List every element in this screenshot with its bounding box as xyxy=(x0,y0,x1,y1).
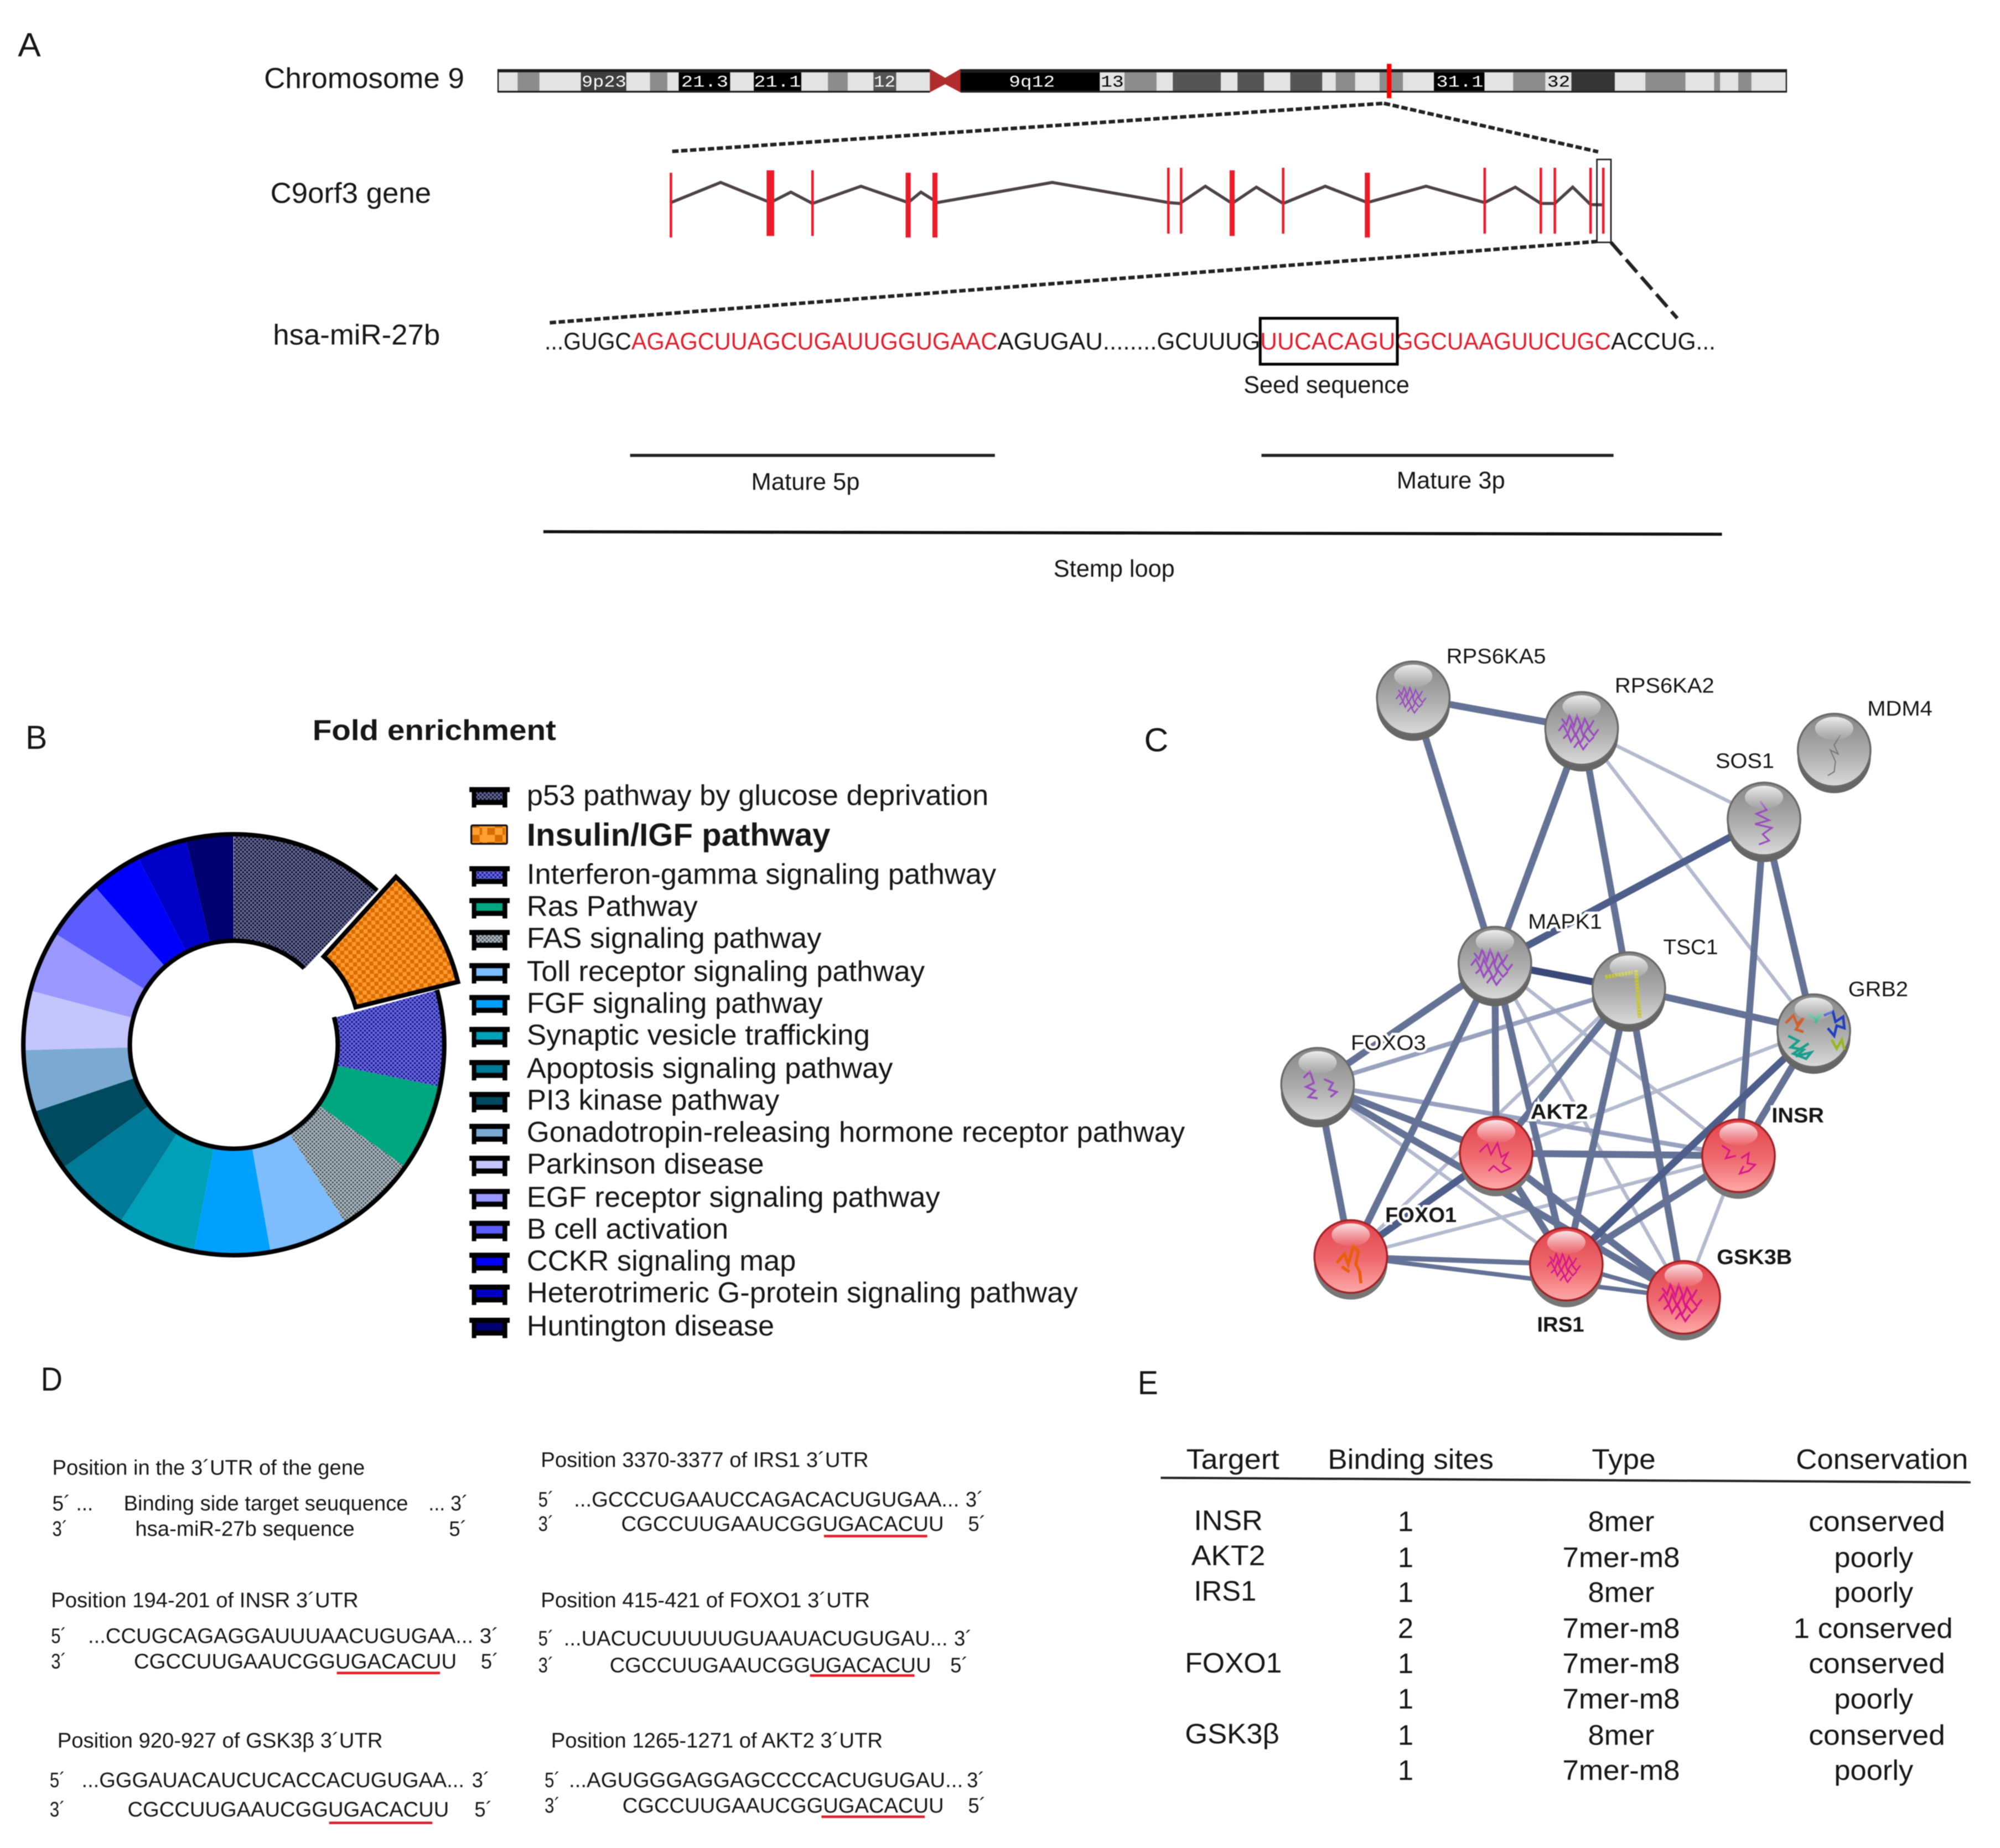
alignment: GSK3β: Position 920-927 of GSK3β 3´UTR xyxy=(58,1730,382,1753)
legend row: Apoptosis: Apoptosis signaling pathway xyxy=(527,1052,893,1084)
node labels xyxy=(1351,645,1932,1337)
panel E: target table xyxy=(1138,1364,1971,1786)
alignment: IRS1: 3´ xyxy=(538,1513,553,1536)
node: GRB2 xyxy=(1777,995,1851,1074)
alignment: INSR: 3´ xyxy=(480,1625,499,1648)
precursor sequence: AGAGCUUAGCUGAUUGGUGAAC xyxy=(631,328,997,355)
alignment: AKT2: Position 1265-1271 of AKT2 3´UTR xyxy=(551,1730,883,1753)
alignment: AKT2: 5´ xyxy=(545,1769,560,1792)
chromosome ideogram: 21.3 xyxy=(681,73,728,92)
legend row: Gonadotropin: Gonadotropin-releasing hormone receptor pathway xyxy=(527,1116,1185,1148)
precursor sequence: GCUUUG xyxy=(1157,328,1260,355)
panel letter C: C xyxy=(1144,722,1168,759)
alignment: FOXO1: 5´ xyxy=(538,1627,553,1650)
alignment: INSR xyxy=(51,1589,499,1674)
table column: type: 8mer xyxy=(1588,1506,1654,1538)
alignment: FOXO1 xyxy=(538,1589,972,1678)
alignment: FOXO1: CGCCUUGAAUCGGUGACACUU xyxy=(610,1654,931,1678)
node labels: GRB2 xyxy=(1848,978,1908,1001)
alignment: GSK3β: 5´ xyxy=(50,1769,65,1792)
table column: target: IRS1 xyxy=(1194,1575,1256,1607)
chromosome ideogram: 31.1 xyxy=(1436,73,1484,92)
precursor sequence: UUCACAGU xyxy=(1260,328,1395,355)
legend row: Toll: Toll receptor signaling pathway xyxy=(527,955,925,987)
alignment: GSK3β: CGCCUUGAAUCGGUGACACUU xyxy=(127,1798,449,1821)
node: FOXO1 xyxy=(1314,1220,1387,1300)
panel letter B: B xyxy=(25,719,47,756)
table header: Binding sites xyxy=(1328,1443,1494,1475)
alignment: IRS1: CGCCUUGAAUCGGUGACACUU xyxy=(621,1513,944,1536)
legend row: Interferon-gamma: Interferon-gamma signaling pathway xyxy=(527,858,996,890)
table column: type: 7mer-m8 xyxy=(1562,1754,1680,1786)
node labels: SOS1 xyxy=(1716,750,1774,773)
legend xyxy=(469,779,1185,1342)
alignment: IRS1: 3´ xyxy=(966,1488,983,1511)
table column: type: 7mer-m8 xyxy=(1562,1683,1680,1715)
alignment legend: hsa-miR-27b sequence xyxy=(135,1518,355,1541)
stem loop bar and label xyxy=(543,532,1722,582)
table column: binding sites: 2 xyxy=(1398,1612,1413,1644)
panel letter D: D xyxy=(41,1360,63,1397)
table column: target: INSR xyxy=(1194,1504,1263,1536)
table column: binding sites: 1 xyxy=(1398,1506,1413,1538)
legend row: Huntington: Huntington disease xyxy=(527,1309,774,1342)
node labels: MAPK1 xyxy=(1528,910,1602,934)
node labels: INSR xyxy=(1771,1104,1824,1127)
network edges xyxy=(1318,698,1814,1297)
table column: target xyxy=(1185,1504,1282,1749)
legend row: B cell: B cell activation xyxy=(527,1213,728,1245)
node: MDM4 xyxy=(1797,714,1871,793)
legend row: p53: p53 pathway by glucose deprivation xyxy=(527,779,988,811)
precursor sequence xyxy=(545,328,1716,355)
label: Chromosome 9: Chromosome 9 xyxy=(264,62,464,94)
legend row: Synaptic: Synaptic vesicle trafficking xyxy=(527,1019,870,1051)
table column: type: 8mer xyxy=(1588,1719,1654,1751)
table column: conservation: poorly xyxy=(1834,1754,1914,1786)
table column: conservation: 1 conserved xyxy=(1794,1612,1953,1644)
legend row: PI3 kinase: PI3 kinase pathway xyxy=(527,1084,779,1116)
panel letter A: A xyxy=(18,26,41,63)
precursor sequence: ACCUG... xyxy=(1611,328,1716,355)
chromosome ideogram: 32 xyxy=(1547,73,1570,92)
panel D: binding site alignments xyxy=(41,1360,986,1824)
alignment: AKT2: ...AGUGGGAGGAGCCCCACUGUGAU... xyxy=(569,1769,963,1792)
chromosome ideogram xyxy=(498,64,1787,98)
panel C: protein interaction network xyxy=(1144,645,1932,1340)
gene structure: introns and exons xyxy=(670,159,1611,242)
panel A: gene locus xyxy=(18,26,1787,582)
table column: binding sites: 1 xyxy=(1398,1683,1413,1715)
mature 5p bar and label xyxy=(630,454,995,495)
mature 3p bar and label: Mature 3p xyxy=(1397,467,1505,494)
table header: Targert xyxy=(1186,1443,1279,1475)
alignment: GSK3β xyxy=(50,1730,493,1824)
node: INSR xyxy=(1702,1119,1775,1199)
alignment: INSR: 5´ xyxy=(481,1650,499,1674)
label: hsa-miR-27b: hsa-miR-27b xyxy=(273,318,440,350)
node labels: RPS6KA5 xyxy=(1447,645,1546,669)
alignment: AKT2: CGCCUUGAAUCGGUGACACUU xyxy=(623,1794,944,1818)
node labels: TSC1 xyxy=(1664,936,1718,959)
chromosome ideogram: 12 xyxy=(874,73,895,92)
table column: binding sites: 1 xyxy=(1398,1719,1413,1751)
table column: conservation: conserved xyxy=(1809,1719,1945,1751)
table column: binding sites: 1 xyxy=(1398,1576,1413,1608)
table column: conservation: conserved xyxy=(1809,1648,1945,1679)
node: GSK3B xyxy=(1647,1261,1721,1340)
node: RPS6KA2 xyxy=(1545,692,1618,772)
legend row: EGF: EGF receptor signaling pathway xyxy=(527,1181,940,1213)
alignment: IRS1: ...GCCCUGAAUCCAGACACUGUGAA... xyxy=(574,1488,959,1511)
table column: binding sites: 1 xyxy=(1398,1648,1413,1679)
table column: type: 7mer-m8 xyxy=(1562,1648,1680,1679)
alignment: IRS1 xyxy=(538,1449,986,1538)
alignment: FOXO1: 5´ xyxy=(950,1654,968,1678)
alignment legend: 5´ xyxy=(449,1518,467,1541)
alignment: FOXO1: 3´ xyxy=(538,1654,553,1678)
alignment legend xyxy=(53,1456,468,1541)
alignment: GSK3β: 5´ xyxy=(474,1798,493,1821)
alignment legend: 5´ ... xyxy=(53,1492,93,1515)
panel B: fold enrichment donut xyxy=(0,714,1185,1342)
node: FOXO3 xyxy=(1281,1048,1354,1127)
node labels: AKT2 xyxy=(1531,1100,1588,1124)
chromosome ideogram: 21.1 xyxy=(754,73,801,92)
legend row: Ras: Ras Pathway xyxy=(527,890,698,922)
seed sequence box xyxy=(1260,318,1397,364)
node: IRS1 xyxy=(1530,1228,1603,1307)
panel letter E: E xyxy=(1138,1364,1158,1401)
table column: conservation: conserved xyxy=(1809,1506,1945,1538)
alignment: IRS1: 5´ xyxy=(968,1513,986,1536)
label: C9orf3 gene: C9orf3 gene xyxy=(271,177,431,209)
legend row: FAS: FAS signaling pathway xyxy=(527,922,821,954)
table column: binding sites xyxy=(1398,1506,1413,1786)
alignment: FOXO1: 3´ xyxy=(954,1627,972,1650)
alignment: INSR: 3´ xyxy=(51,1650,66,1674)
table column: conservation: poorly xyxy=(1834,1542,1914,1573)
chromosome ideogram: 13 xyxy=(1101,73,1124,92)
table column: conservation: poorly xyxy=(1834,1683,1914,1715)
node: SOS1 xyxy=(1727,783,1801,862)
table column: type xyxy=(1562,1506,1680,1786)
alignment: INSR: CGCCUUGAAUCGGUGACACUU xyxy=(134,1650,457,1674)
alignment legend: Binding side target seuquence xyxy=(124,1492,408,1515)
table column: binding sites: 1 xyxy=(1398,1754,1413,1786)
alignment: IRS1: Position 3370-3377 of IRS1 3´UTR xyxy=(541,1449,869,1472)
node: TSC1 xyxy=(1592,953,1666,1032)
table column: target: GSK3β xyxy=(1185,1718,1279,1749)
alignment: INSR: ...CCUGCAGAGGAUUUAACUGUGAA... xyxy=(88,1625,473,1648)
table header: Type xyxy=(1592,1443,1656,1475)
node labels: FOXO1 xyxy=(1385,1204,1457,1227)
alignment legend: ... 3´ xyxy=(428,1492,468,1515)
alignment: GSK3β: 3´ xyxy=(472,1769,490,1792)
table column: conservation xyxy=(1794,1506,1953,1786)
alignment: GSK3β: ...GGGAUACAUCUCACCACUGUGAA... xyxy=(82,1769,464,1792)
exploded slice: Insulin/IGF pathway xyxy=(324,877,458,1007)
alignment: AKT2: 3´ xyxy=(967,1769,985,1792)
table header: Conservation xyxy=(1796,1443,1968,1475)
alignment: INSR: 5´ xyxy=(51,1625,66,1648)
heading: Fold enrichment: Fold enrichment xyxy=(313,714,556,746)
table column: type: 8mer xyxy=(1588,1576,1654,1608)
alignment: FOXO1: Position 415-421 of FOXO1 3´UTR xyxy=(541,1589,870,1612)
legend row: Heterotrimeric: Heterotrimeric G-protein signaling pathway xyxy=(527,1276,1078,1308)
alignment: AKT2: 3´ xyxy=(545,1794,560,1818)
alignment: FOXO1: ...UACUCUUUUUGUAAUACUGUGAU... xyxy=(564,1627,948,1650)
alignment legend: 3´ xyxy=(53,1518,68,1541)
table column: type: 7mer-m8 xyxy=(1562,1542,1680,1573)
precursor sequence: GGCUAAGUUCUGC xyxy=(1395,328,1611,355)
chromosome ideogram: 9q12 xyxy=(1009,73,1055,92)
node labels: RPS6KA2 xyxy=(1615,675,1714,698)
precursor sequence: ...GUGC xyxy=(545,328,631,355)
dashed zoom lines gene to sequence xyxy=(550,241,1677,323)
alignment: INSR: Position 194-201 of INSR 3´UTR xyxy=(51,1589,359,1612)
alignment: AKT2 xyxy=(545,1730,986,1818)
node labels: IRS1 xyxy=(1537,1313,1584,1337)
chromosome ideogram: 9p23 xyxy=(582,73,626,92)
alignment: AKT2: 5´ xyxy=(968,1794,986,1818)
node labels: FOXO3 xyxy=(1351,1032,1426,1055)
alignment: GSK3β: 3´ xyxy=(50,1798,65,1821)
alignment legend: Position in the 3´UTR of the gene xyxy=(53,1456,365,1479)
legend row: CCKR: CCKR signaling map xyxy=(527,1245,796,1277)
mature 5p bar and label: Mature 5p xyxy=(752,468,859,495)
table column: target: FOXO1 xyxy=(1185,1647,1282,1679)
legend row: FGF: FGF signaling pathway xyxy=(527,987,823,1019)
stem loop bar and label: Stemp loop xyxy=(1054,555,1175,582)
label: seed sequence: Seed sequence xyxy=(1243,371,1410,398)
node labels: GSK3B xyxy=(1717,1246,1792,1269)
table column: binding sites: 1 xyxy=(1398,1542,1413,1573)
node: RPS6KA5 xyxy=(1376,661,1450,741)
legend row: Insulin/IGF: Insulin/IGF pathway xyxy=(527,817,830,853)
dashed zoom lines chromosome to gene xyxy=(672,103,1598,152)
node labels: MDM4 xyxy=(1867,697,1932,721)
legend row: Parkinson: Parkinson disease xyxy=(527,1147,764,1179)
precursor sequence: AGUGAU........ xyxy=(997,328,1157,355)
table column: conservation: poorly xyxy=(1834,1576,1914,1608)
mature 3p bar and label xyxy=(1261,454,1614,494)
node: AKT2 xyxy=(1459,1117,1533,1196)
table column: target: AKT2 xyxy=(1191,1540,1265,1571)
table column: type: 7mer-m8 xyxy=(1562,1612,1680,1644)
alignment: IRS1: 5´ xyxy=(538,1488,553,1511)
table header xyxy=(1160,1443,1971,1482)
node: MAPK1 xyxy=(1458,926,1532,1006)
donut chart xyxy=(0,787,491,1302)
